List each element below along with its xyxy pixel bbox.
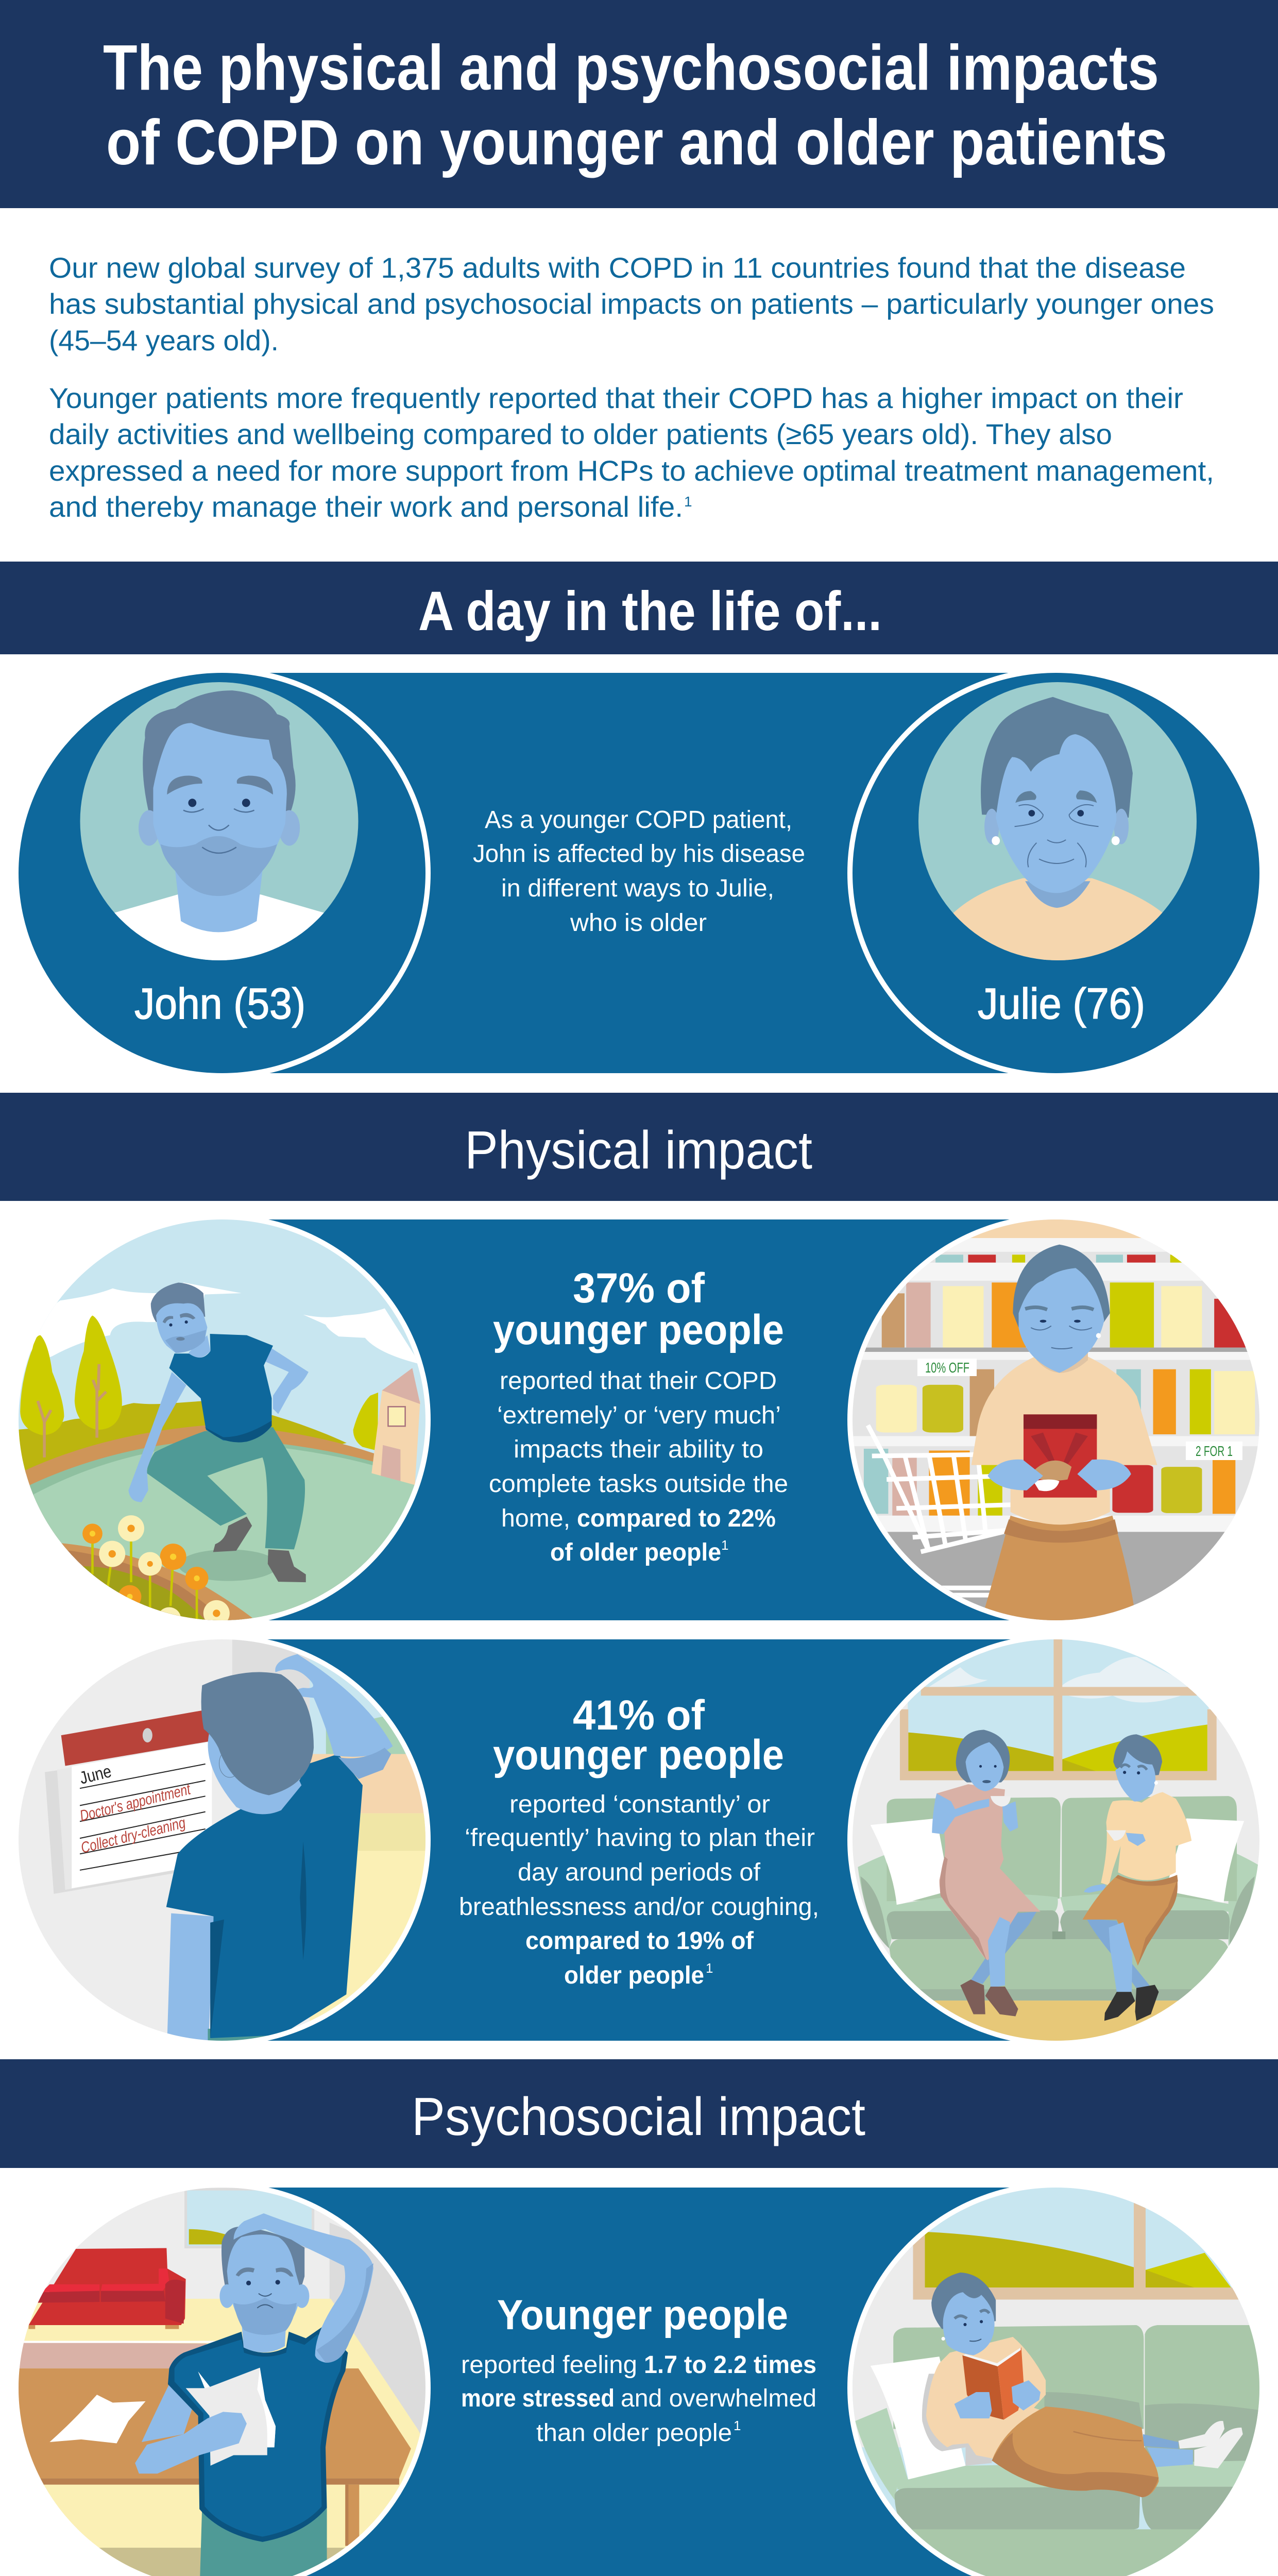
text: 37% body: of older people: [550, 1539, 721, 1566]
section banner: physical impact: [0, 1093, 1278, 1201]
heading: 37% of younger people: younger people: [493, 1307, 784, 1353]
intro text block: has substantial physical and psychosocial impacts on patients – particularly younger ones: [49, 287, 1214, 320]
text: 41% body: 1: [706, 1960, 713, 1976]
heading: 41% of younger people: 41% of: [573, 1692, 705, 1739]
title: [103, 32, 1167, 178]
text: stress body: reported feeling: [461, 2351, 637, 2379]
text: intro to John and Julie: who is older: [570, 909, 707, 937]
price tag: 10% off: 10% OFF: [925, 1360, 969, 1376]
intro text block: Our new global survey of 1,375 adults with COPD in 11 countries found that the disease: [49, 251, 1186, 284]
intro text block: daily activities and wellbeing compared to older patients (≥65 years old). They also: [49, 418, 1112, 450]
section banner: a day in the life: A day in the life of...: [418, 580, 882, 642]
text: 37% body: compared to 22%: [577, 1505, 776, 1532]
text: 37% body: [489, 1367, 788, 1566]
text: intro to John and Julie: As a younger COPD patient,: [485, 806, 792, 834]
text: 37% body: home,: [501, 1505, 570, 1532]
text: 41% body: reported ‘constantly’ or: [509, 1791, 770, 1818]
text: 37% body: ‘extremely’ or ‘very much’: [497, 1402, 781, 1429]
illustration: woman in supermarket: [847, 1217, 1263, 1624]
intro text block: (45–54 years old).: [49, 324, 279, 357]
text: stress body: and overwhelmed: [621, 2385, 816, 2412]
text: stress body: [461, 2351, 816, 2447]
text: 37% body: 1: [721, 1537, 728, 1553]
section banner: a day in the life: [0, 562, 1278, 654]
text: intro to John and Julie: in different ways to Julie,: [501, 875, 774, 902]
label: Julie: Julie (76): [978, 979, 1145, 1028]
panel: John and Julie: [13, 668, 1265, 1079]
price tag: 10% off: [917, 1359, 977, 1376]
text: 37% body: impacts their ability to: [514, 1436, 763, 1463]
panel: 37% of younger people: [13, 1214, 1265, 1631]
heading: 37% of younger people: [493, 1265, 784, 1353]
text: stress body: 1: [734, 2418, 741, 2433]
intro text block: [49, 251, 1214, 523]
text: intro to John and Julie: [473, 806, 805, 937]
text: 41% body: [459, 1791, 819, 1989]
heading: Younger people: Younger people: [497, 2292, 788, 2338]
title: of COPD on younger and older patients: [106, 107, 1167, 178]
illustration: stressed man at table: [15, 2184, 428, 2576]
text: stress body: more stressed: [461, 2385, 615, 2412]
heading: 41% of younger people: younger people: [493, 1732, 784, 1778]
intro text block: 1: [684, 494, 692, 510]
section banner: psychosocial impact: Psychosocial impact: [412, 2087, 865, 2147]
price tag: 2 for 1: [1186, 1442, 1242, 1460]
text: intro to John and Julie: John is affected by his disease: [473, 840, 805, 868]
label: John: John (53): [134, 979, 305, 1028]
panel: younger people stressed: [13, 2182, 1265, 2576]
text: 37% body: reported that their COPD: [500, 1367, 777, 1395]
portrait: Julie: [914, 680, 1203, 965]
portrait: John: [77, 680, 366, 965]
section banner: physical impact: Physical impact: [465, 1121, 812, 1180]
text: stress body: 1.7 to 2.2 times: [644, 2351, 816, 2379]
intro text block: expressed a need for more support from HCPs to achieve optimal treatment management,: [49, 454, 1214, 487]
illustration: man reading calendar: [16, 1638, 428, 2044]
section banner: psychosocial impact: [0, 2059, 1278, 2168]
text: calendar appointment: Doctor's appointment: [78, 1781, 193, 1825]
text: 37% body: complete tasks outside the: [489, 1470, 788, 1498]
title: The physical and psychosocial impacts: [103, 32, 1159, 104]
text: calendar month: June: [78, 1761, 113, 1788]
panel: 41% of younger people: [13, 1634, 1265, 2050]
illustration: woman reading on sofa: [850, 2184, 1262, 2576]
text: 41% body: older people: [564, 1962, 704, 1989]
title banner: [0, 0, 1278, 208]
illustration: man in garden: [15, 1217, 428, 1631]
intro text block: and thereby manage their work and personal life.: [49, 490, 683, 523]
illustration: two women on sofa: [850, 1638, 1262, 2050]
text: 41% body: day around periods of: [518, 1859, 761, 1886]
price tag: 2 for 1: 2 FOR 1: [1196, 1443, 1233, 1459]
text: 41% body: ‘frequently’ having to plan their: [465, 1824, 815, 1852]
text: stress body: than older people: [536, 2419, 732, 2447]
heading: 37% of younger people: 37% of: [573, 1265, 705, 1312]
intro text block: Younger patients more frequently reported that their COPD has a higher impact on their: [49, 382, 1183, 414]
heading: 41% of younger people: [493, 1692, 784, 1778]
text: calendar dry-cleaning: Collect dry-cleaning: [79, 1814, 188, 1857]
text: 41% body: breathlessness and/or coughing,: [459, 1893, 819, 1921]
text: 41% body: compared to 19% of: [525, 1927, 754, 1955]
